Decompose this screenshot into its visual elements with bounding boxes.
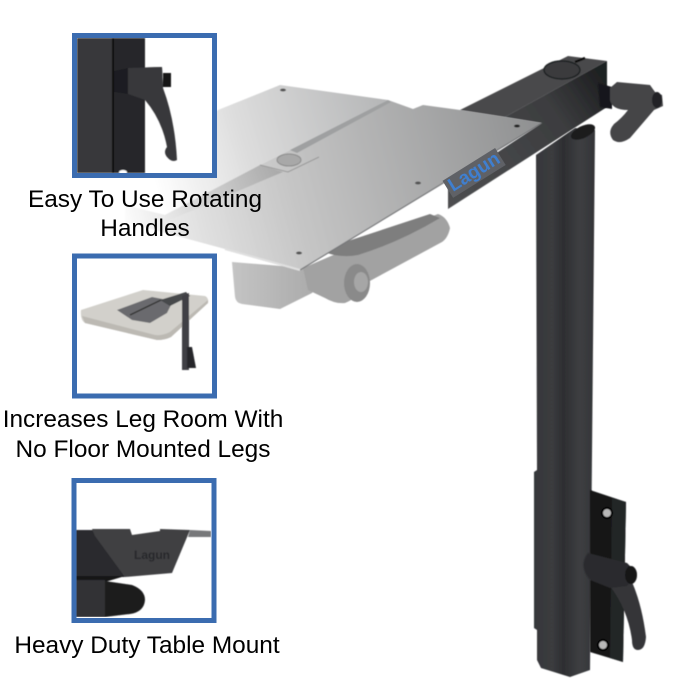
blue frame <box>74 36 214 176</box>
product photo: table mount <box>125 85 542 309</box>
logo badge: Lagun <box>445 148 504 196</box>
arm top face <box>460 56 607 117</box>
slot groove <box>290 100 391 153</box>
column <box>534 121 597 677</box>
table top photo <box>81 290 208 370</box>
under-plate handle <box>303 214 450 303</box>
wall bracket and lower clamp handle <box>583 490 646 662</box>
caption: table mount: Heavy Duty Table Mount <box>14 632 280 659</box>
upper clamp handle <box>598 82 663 142</box>
arm knob disc <box>544 61 580 79</box>
blue frame <box>74 256 214 396</box>
bracket plate <box>590 490 626 662</box>
plate back section <box>125 85 388 215</box>
caption: rotating handles: Easy To Use Rotating <box>28 186 262 213</box>
blue frame <box>74 480 214 620</box>
screw holes <box>280 88 520 254</box>
plate front section <box>125 100 542 270</box>
mount box under plate <box>232 262 330 309</box>
center hole <box>277 154 301 166</box>
bracket holes <box>602 508 612 518</box>
handle close-up photo <box>77 38 177 174</box>
arm <box>448 56 607 209</box>
caption line: no floor legs: No Floor Mounted Legs <box>16 436 270 463</box>
panel: table mount <box>74 480 214 620</box>
caption line: handles: Handles <box>100 215 190 242</box>
panel: rotating handles <box>74 36 214 176</box>
plate front edge <box>300 123 542 270</box>
panel: leg room <box>74 256 214 396</box>
embossed logo: Lagun <box>134 548 170 562</box>
lever arm <box>610 582 646 650</box>
caption: leg room: Increases Leg Room With <box>3 406 283 433</box>
lever cylinder <box>583 553 637 588</box>
lever nut <box>625 566 637 584</box>
arm front face <box>448 61 607 209</box>
